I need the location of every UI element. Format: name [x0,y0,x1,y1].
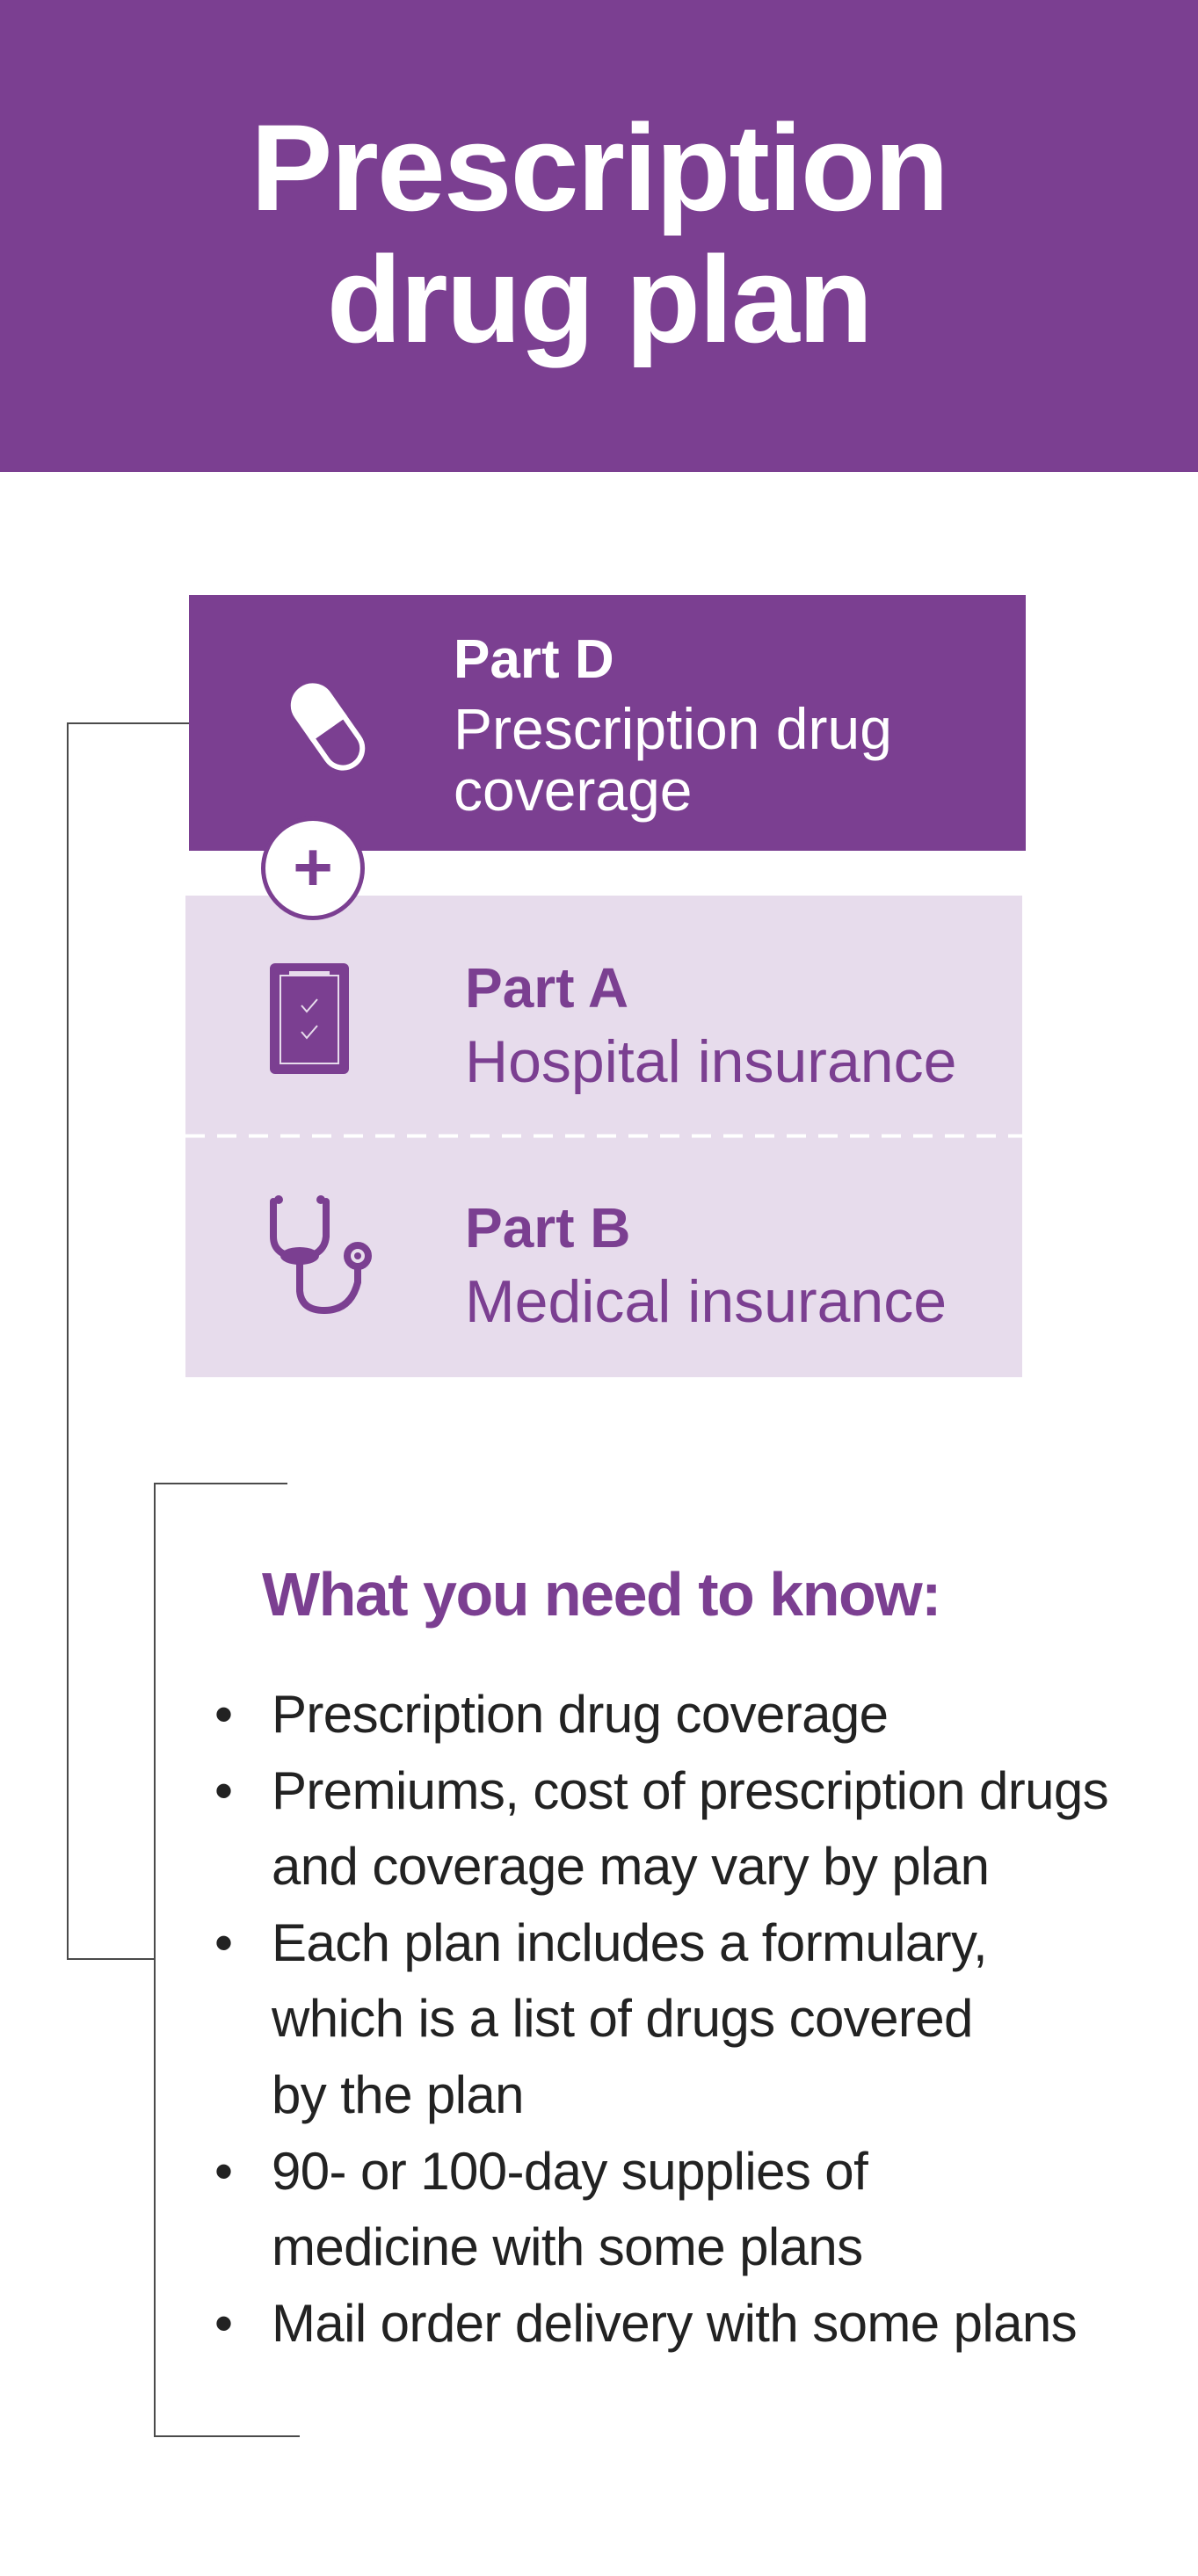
panel: Part D [189,595,1026,851]
text: Part D [454,629,892,823]
divider dashed [185,1134,1022,1137]
bracket: inner list bracket [154,1483,300,2437]
panel: Part A and Part B [185,896,1022,1377]
bullet list: • [214,1913,232,1972]
bullet list: Premiums, cost of prescription drugs [272,1761,1108,1820]
icon: stethoscope [270,1195,372,1314]
bullet list: and coverage may vary by plan [272,1837,989,1896]
bullet list [214,1685,1108,2353]
bullet list: 90- or 100-day supplies of [272,2142,868,2201]
text: Part D: Prescription drug [454,696,892,761]
bullet list: Mail order delivery with some plans [272,2294,1077,2353]
bullet list: which is a list of drugs covered [272,1989,973,2048]
bullet list: • [214,1685,232,1744]
bullet list: by the plan [272,2065,524,2124]
icon: pill [290,683,366,771]
bullet list: medicine with some plans [272,2217,863,2276]
title: Prescription [250,98,948,236]
text: Part D: coverage [454,758,693,823]
bullet list: Prescription drug coverage [272,1685,888,1744]
title [250,98,948,368]
header banner [0,0,1198,472]
bullet list: • [214,1761,232,1820]
icon: plus circle [261,816,365,920]
text: Part B: Part B [465,1196,631,1259]
icon: plus circle: + [293,828,333,905]
text: Part A: Hospital insurance [465,1028,956,1095]
text: Part B: Medical insurance [465,1268,947,1335]
text: Part A: Part A [465,956,628,1020]
text: Part D: Part D [454,629,614,690]
text: Part A [465,956,956,1095]
icon: clipboard [270,963,349,1074]
bullet list: Each plan includes a formulary, [272,1913,987,1972]
bullet list: • [214,2142,232,2201]
title: drug plan [327,230,871,368]
heading: what you need to know: What you need to know: [262,1560,940,1629]
text: Part B [465,1196,947,1335]
bracket: outer connector [67,722,189,1960]
bullet list: • [214,2294,232,2353]
